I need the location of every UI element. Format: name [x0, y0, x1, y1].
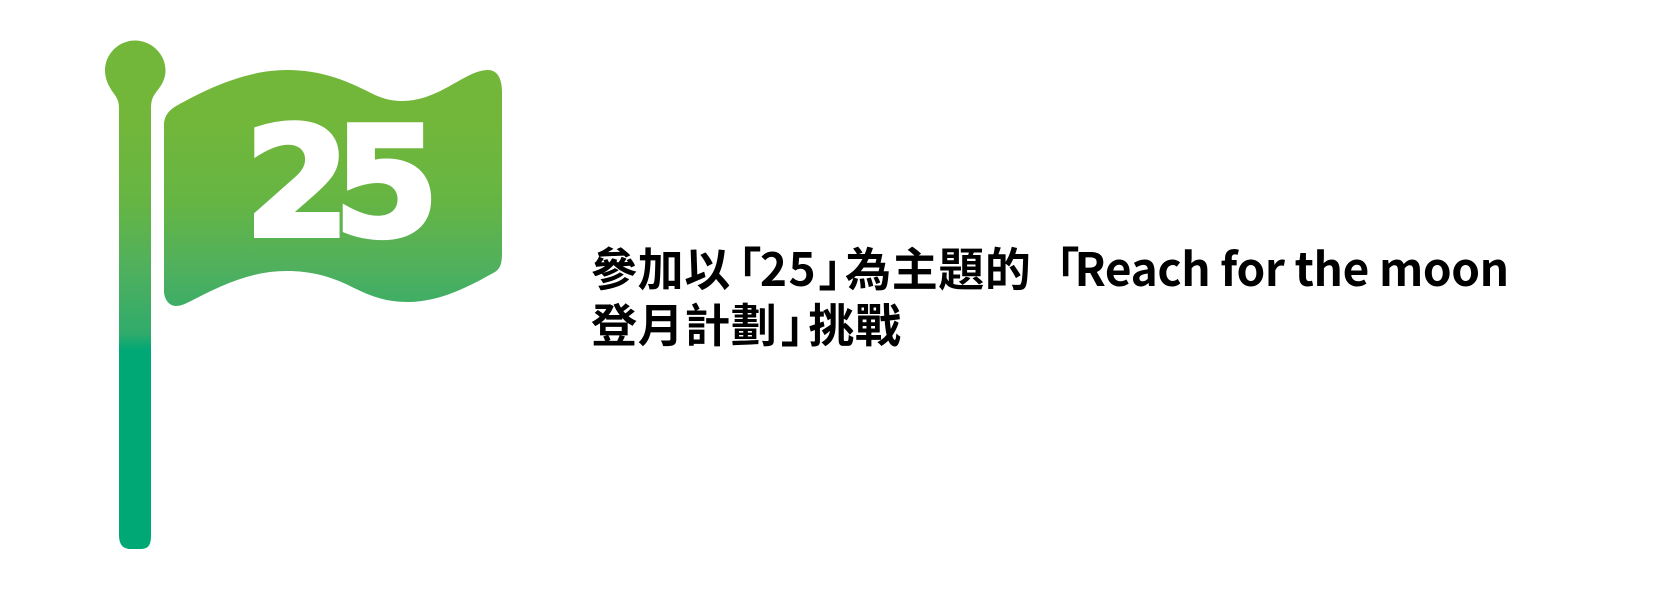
heading text: 參加以 25 為主題的「Reach for the moon	[591, 234, 1509, 300]
heading text	[591, 234, 1509, 356]
heading text: 登月計劃 挑戰	[591, 290, 902, 356]
number 25	[244, 94, 439, 272]
flag banner	[164, 70, 502, 306]
heading text: 」	[819, 234, 842, 300]
digit 5 outline gap: 5	[334, 94, 439, 272]
digit 2: 2	[244, 94, 350, 272]
digit 5: 5	[334, 94, 439, 272]
heading text: 「	[738, 234, 761, 300]
flag pole	[105, 40, 166, 549]
heading text: 」	[781, 290, 804, 356]
